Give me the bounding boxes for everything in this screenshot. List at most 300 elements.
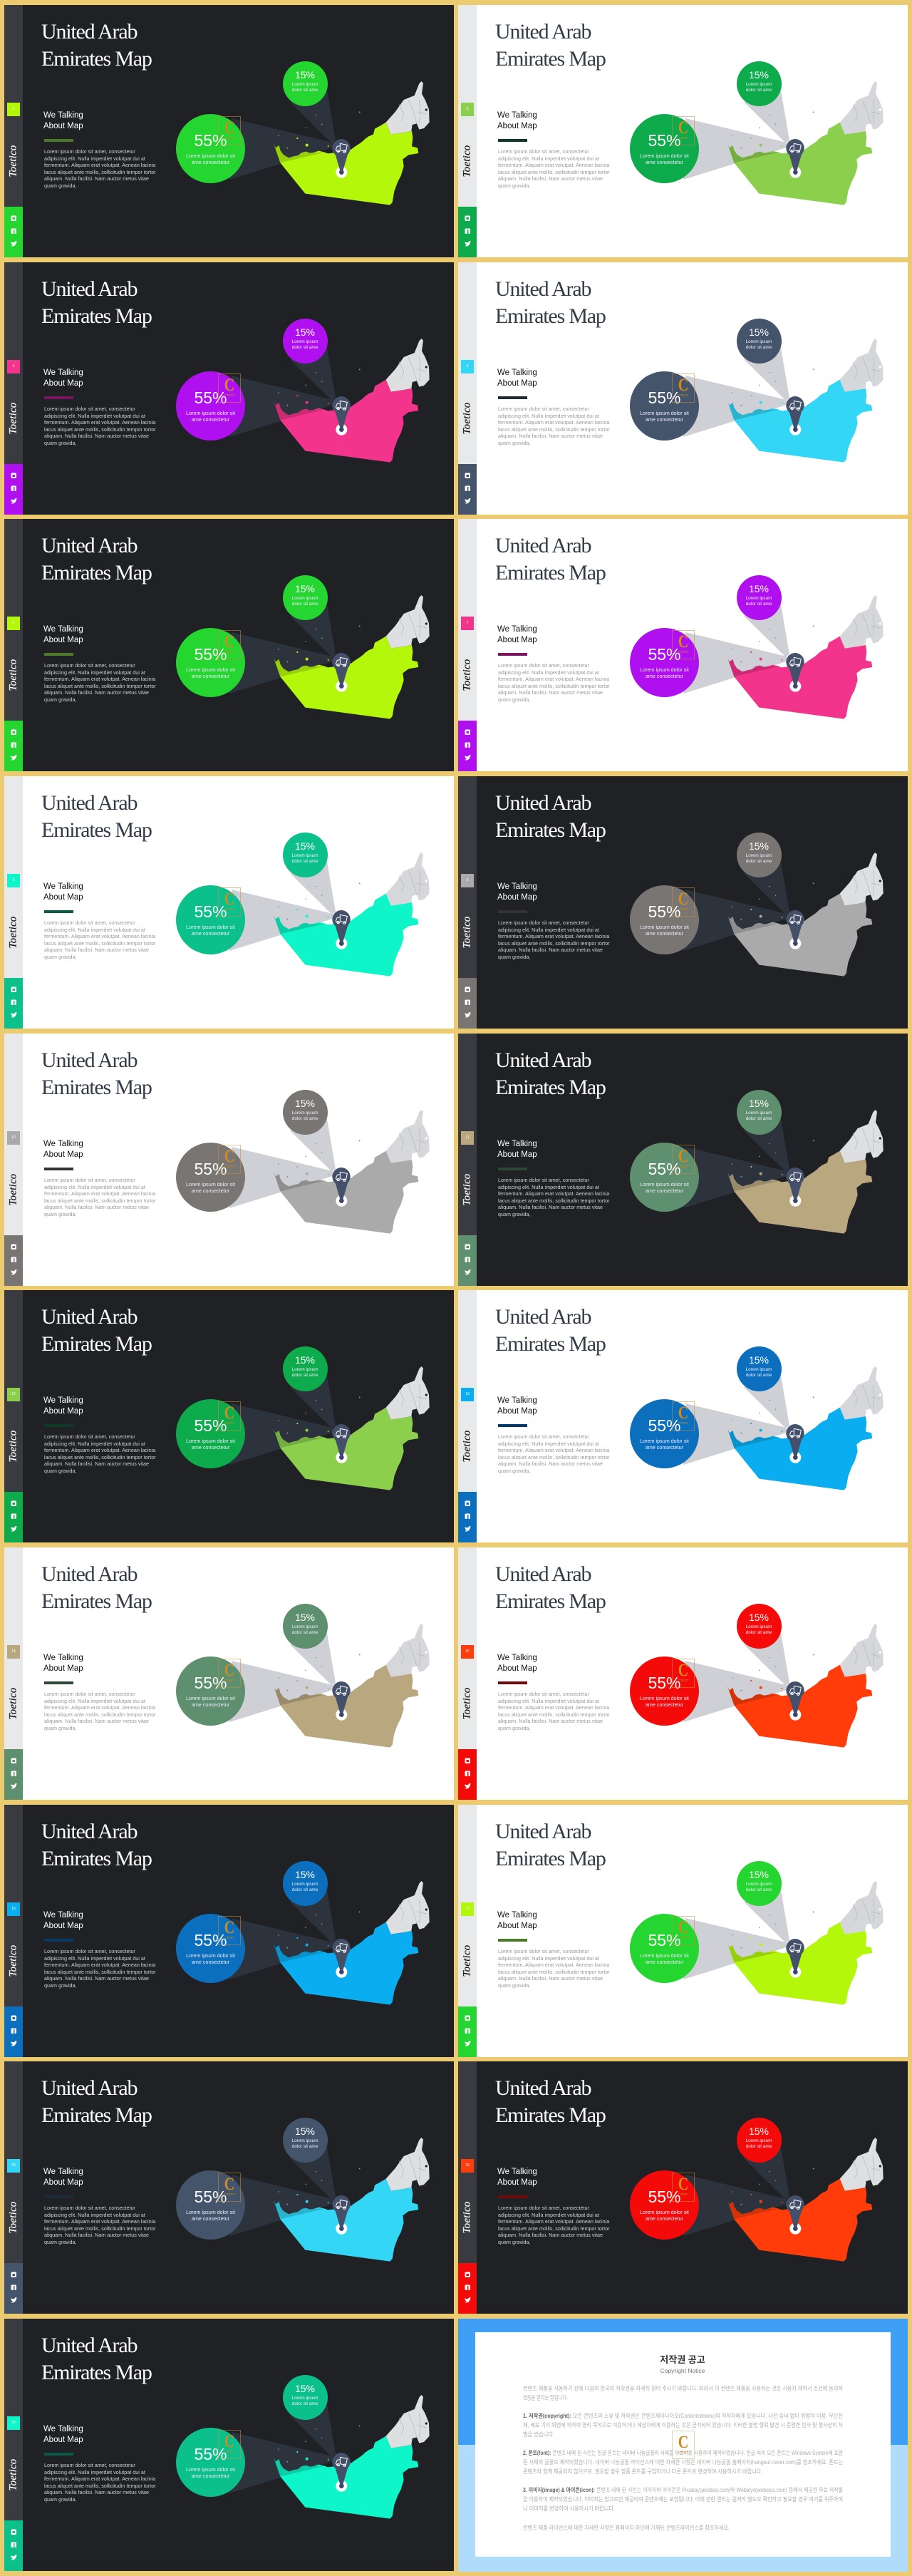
body text: adipiscing elit. Nulla imperdiet volutpat dui at <box>44 155 145 162</box>
panel: copyright notice <box>458 2319 908 2572</box>
social icons <box>4 207 23 257</box>
callout: 55%: ame consectetur <box>192 2473 229 2479</box>
watermark logo: C <box>224 1661 234 1680</box>
watermark logo: CTEST <box>224 1165 234 1168</box>
section 3: image and icon <box>523 2486 843 2512</box>
watermark logo: C <box>678 2175 688 2194</box>
subheading: About Map <box>497 893 537 902</box>
slide number badge <box>461 360 474 373</box>
callout: 55%: 55% <box>194 2445 227 2463</box>
map with pin <box>4 1290 454 1542</box>
slide number badge: 10 <box>11 1135 16 1140</box>
body text: Lorem ipsum dolor sit amet, consectetur <box>498 406 589 412</box>
body text: adipiscing elit. Nulla imperdiet volutpat dui at <box>44 1184 145 1190</box>
callout: 55% <box>630 114 699 182</box>
brand name: Toetico <box>7 659 19 691</box>
slide number badge: 14 <box>11 1649 16 1654</box>
title <box>41 791 152 842</box>
title: United Arab <box>41 20 137 43</box>
title: Emirates Map <box>495 1076 606 1099</box>
slide number badge <box>7 1902 20 1916</box>
brand name: Toetico <box>462 1173 473 1206</box>
body text: fermentum. Aliquam erat volutpat. Aenean lacinia <box>44 1447 155 1453</box>
intro paragraph: 셨음을 알리는 말입니다. <box>523 2394 568 2401</box>
callout: 55%: Lorem ipsum dolor sit <box>186 1180 235 1187</box>
subheading: About Map <box>497 1664 537 1673</box>
body text: aliquam. Nulla facilisi. Nam auctor metus vitae <box>44 689 149 696</box>
body text: fermentum. Aliquam erat volutpat. Aenean lacinia <box>44 2218 155 2225</box>
callout: 55%: 55% <box>194 1159 227 1178</box>
body text: lacus aliquet ante mollis, sollicitudin tempor tortor <box>498 1454 610 1460</box>
watermark logo <box>672 373 695 403</box>
body text <box>498 1177 610 1217</box>
social icons <box>458 1492 477 1542</box>
title: United Arab <box>495 277 591 301</box>
slide number badge <box>461 1902 474 1916</box>
brand name: Toetico <box>462 1944 473 1977</box>
body text <box>44 2205 156 2245</box>
sidebar <box>4 1034 23 1286</box>
subheading <box>43 369 83 388</box>
callout: 55%: Lorem ipsum dolor sit <box>186 2466 235 2472</box>
callout: 15% <box>282 1860 328 1906</box>
callout: 15%: Lorem ipsum <box>292 82 318 87</box>
body text: Lorem ipsum dolor sit amet, consectetur <box>44 1948 135 1954</box>
title: United Arab <box>41 534 137 557</box>
watermark logo <box>672 630 695 659</box>
body text: lacus aliquet ante mollis, sollicitudin tempor tortor <box>498 169 610 175</box>
sidebar <box>458 262 477 515</box>
title: United Arab <box>495 1049 591 1072</box>
subheading: We Talking <box>497 111 537 120</box>
subheading: About Map <box>43 1150 83 1159</box>
title: Emirates Map <box>495 818 606 842</box>
brand name: Toetico <box>7 2201 19 2234</box>
callout: 15%: 15% <box>295 1098 315 1109</box>
body text: lacus aliquet ante mollis, sollicitudin tempor tortor <box>44 683 156 689</box>
callout: 15%: dolor sit ame <box>292 88 318 93</box>
slide number badge <box>7 360 20 373</box>
subheading: We Talking <box>497 2168 537 2176</box>
subheading: About Map <box>497 122 537 130</box>
callout: 15%: 15% <box>749 1354 769 1366</box>
slide number badge <box>461 103 474 116</box>
brand name: Toetico <box>7 2458 19 2491</box>
title: Emirates Map <box>41 1847 152 1870</box>
body text: Lorem ipsum dolor sit amet, consectetur <box>44 1691 135 1697</box>
callout: 55%: ame consectetur <box>646 673 683 679</box>
sidebar <box>458 1034 477 1286</box>
title: United Arab <box>41 277 137 301</box>
subheading <box>497 1910 537 1931</box>
callout: 55%: Lorem ipsum dolor sit <box>186 153 235 158</box>
callout: 15%: dolor sit ame <box>746 602 772 607</box>
title: Emirates Map <box>41 47 152 71</box>
social icons <box>4 2520 23 2571</box>
body text <box>44 406 156 446</box>
watermark logo: CTEST <box>224 2450 234 2453</box>
body text: Lorem ipsum dolor sit amet, consectetur <box>44 662 135 669</box>
brand name: Toetico <box>462 916 473 949</box>
body text: aliquam. Nulla facilisi. Nam auctor metus vitae <box>498 1975 603 1982</box>
subheading: About Map <box>43 1922 83 1930</box>
watermark logo <box>218 2430 241 2459</box>
subheading: We Talking <box>43 369 83 377</box>
subheading <box>497 1653 537 1674</box>
callout: 55%: 55% <box>194 644 227 663</box>
body text: aliquam. Nulla facilisi. Nam auctor metus vitae <box>44 2489 149 2495</box>
callout: 15%: Lorem ipsum <box>292 1882 318 1887</box>
watermark logo: CTEST <box>224 1679 234 1682</box>
panel: slide 19 <box>4 2319 454 2570</box>
subheading: About Map <box>43 893 83 902</box>
title <box>495 1304 606 1357</box>
body text: fermentum. Aliquam erat volutpat. Aenean lacinia <box>498 419 609 426</box>
intro paragraph: 컨텐츠 제품을 사용하기 전에 다음의 한국의 저작권을 자세히 읽어 주시기 바랍니다. 따라서 이 컨텐츠 제품을 사용하는 것은 사용자 계약서 조건에 동의하 <box>523 2385 843 2392</box>
map with pin <box>4 1547 454 1799</box>
watermark logo <box>218 1916 241 1945</box>
callout: 15% <box>282 61 328 105</box>
title: Emirates Map <box>495 304 606 328</box>
title: Emirates Map <box>41 304 152 328</box>
callout: 15% <box>737 318 781 364</box>
body text: fermentum. Aliquam erat volutpat. Aenean lacinia <box>44 1704 155 1711</box>
title: United Arab <box>41 2334 137 2357</box>
callout: 15%: 15% <box>295 1869 315 1880</box>
body text: quam gravida, <box>498 2239 531 2245</box>
white notice card <box>475 2332 891 2557</box>
callout: 55%: Lorem ipsum dolor sit <box>186 1952 235 1959</box>
subheading: We Talking <box>497 1654 537 1662</box>
slide number badge <box>461 1388 474 1401</box>
panel: slide 16 <box>458 1805 908 2057</box>
callout: 15%: Lorem ipsum <box>746 1367 772 1372</box>
body text <box>498 2205 610 2245</box>
callout: 15%: 15% <box>749 1612 769 1623</box>
map with pin <box>458 1290 908 1542</box>
callout: 55% <box>630 1913 699 1983</box>
brand name: Toetico <box>7 1687 19 1720</box>
watermark logo <box>218 1401 241 1431</box>
callout: 15% <box>282 2117 328 2163</box>
body text: lacus aliquet ante mollis, sollicitudin tempor tortor <box>44 2225 156 2232</box>
callout: 55%: Lorem ipsum dolor sit <box>640 666 689 673</box>
watermark logo: C <box>224 632 234 651</box>
watermark logo: C <box>678 376 688 395</box>
social icons <box>4 1235 23 1286</box>
watermark logo: C <box>224 890 234 909</box>
body text: aliquam. Nulla facilisi. Nam auctor metus vitae <box>44 1204 149 1210</box>
callout: 55%: Lorem ipsum dolor sit <box>640 1695 689 1701</box>
title: United Arab <box>495 791 591 815</box>
callout: 55%: 55% <box>648 131 681 150</box>
callout: 55%: ame consectetur <box>646 1187 683 1194</box>
subheading: We Talking <box>43 2425 83 2433</box>
body text: Lorem ipsum dolor sit amet, consectetur <box>498 1433 589 1440</box>
subheading: We Talking <box>43 111 83 120</box>
social icons <box>458 721 477 771</box>
body text: fermentum. Aliquam erat volutpat. Aenean lacinia <box>44 933 155 939</box>
body text: adipiscing elit. Nulla imperdiet volutpat dui at <box>44 1698 145 1704</box>
body text: quam gravida, <box>44 954 77 960</box>
callout: 15%: 15% <box>749 2126 769 2137</box>
panel: slide 5 <box>4 519 454 771</box>
map with pin <box>4 2061 454 2313</box>
callout: 55% <box>176 1142 245 1212</box>
callout: 55%: Lorem ipsum dolor sit <box>640 409 689 416</box>
watermark logo: C <box>678 1147 688 1166</box>
social icons <box>4 2006 23 2057</box>
body text: fermentum. Aliquam erat volutpat. Aenean lacinia <box>498 1447 609 1453</box>
callout: 55%: 55% <box>648 2187 681 2205</box>
callout: 15%: 15% <box>749 840 769 852</box>
subheading: We Talking <box>497 1140 537 1148</box>
callout: 55%: Lorem ipsum dolor sit <box>640 1180 689 1187</box>
watermark logo <box>218 373 241 403</box>
slide number badge: 12 <box>11 1392 16 1396</box>
callout: 55%: Lorem ipsum dolor sit <box>640 153 689 158</box>
callout: 15%: Lorem ipsum <box>292 596 318 601</box>
callout: 15%: dolor sit ame <box>746 859 772 864</box>
section 3: image and icon: 나 이미지를 변경하여 사용하시기 바랍니다. <box>523 2505 615 2512</box>
sidebar <box>458 5 477 257</box>
subheading <box>497 882 537 902</box>
callout: 55%: 55% <box>194 902 227 921</box>
title: Emirates Map <box>41 561 152 584</box>
callout: 15% <box>737 575 781 620</box>
callout: 15%: Lorem ipsum <box>746 1111 772 1116</box>
slide number badge <box>7 1388 20 1401</box>
callout: 15% <box>737 61 781 105</box>
callout: 15%: Lorem ipsum <box>292 2396 318 2401</box>
callout: 15%: 15% <box>295 1612 315 1623</box>
social icons <box>4 2263 23 2314</box>
panel: slide 3 <box>4 262 454 515</box>
callout: 55% <box>630 627 699 697</box>
social icons <box>4 721 23 771</box>
slide number badge: 20 <box>11 2421 16 2425</box>
body text: quam gravida, <box>498 182 531 189</box>
subheading <box>497 111 537 130</box>
callout: 15%: dolor sit ame <box>746 1373 772 1378</box>
watermark logo: C <box>224 1918 234 1937</box>
title: Emirates Map <box>41 2103 152 2127</box>
body text: aliquam. Nulla facilisi. Nam auctor metus vitae <box>498 947 603 953</box>
watermark logo <box>672 1145 695 1174</box>
watermark logo: CTEST <box>678 1679 688 1682</box>
callout: 55%: Lorem ipsum dolor sit <box>186 666 235 673</box>
watermark logo <box>218 116 241 145</box>
body text: quam gravida, <box>498 954 531 960</box>
subheading: About Map <box>497 1150 537 1159</box>
title: Emirates Map <box>495 1847 606 1870</box>
title <box>41 20 152 71</box>
subheading: We Talking <box>43 1654 83 1662</box>
body text: aliquam. Nulla facilisi. Nam auctor metus vitae <box>44 1975 149 1982</box>
body text: quam gravida, <box>44 2239 77 2245</box>
callout: 15% <box>737 1089 781 1135</box>
slide number badge: 17 <box>465 1907 470 1911</box>
social icons <box>458 1235 477 1286</box>
body text: Lorem ipsum dolor sit amet, consectetur <box>498 919 589 926</box>
callout: 55%: Lorem ipsum dolor sit <box>640 1437 689 1444</box>
sidebar <box>4 2061 23 2314</box>
callout: 15%: dolor sit ame <box>292 1887 318 1892</box>
slide number badge: 4 <box>13 364 14 369</box>
section 1: copyright <box>523 2412 843 2438</box>
title <box>41 2075 152 2128</box>
subheading <box>43 2424 83 2445</box>
callout: 55%: ame consectetur <box>192 673 229 679</box>
slide number badge: 16 <box>11 1907 16 1911</box>
body text: quam gravida, <box>44 1725 77 1731</box>
title: Emirates Map <box>41 2361 152 2384</box>
subheading <box>497 2167 537 2188</box>
brand name: Toetico <box>462 1430 473 1463</box>
brand name: Toetico <box>7 402 19 435</box>
watermark logo: CTEST <box>678 650 688 654</box>
title: United Arab <box>41 1820 137 1843</box>
watermark logo: CTEST <box>678 907 688 911</box>
slide number badge: 9 <box>467 878 468 882</box>
section 1: copyright: 벌을 받습니다. <box>523 2431 554 2438</box>
subheading <box>497 625 537 644</box>
panel: slide 11 <box>4 1290 454 1542</box>
panel: slide 10 <box>458 1034 908 1286</box>
social icons <box>4 978 23 1029</box>
body text: aliquam. Nulla facilisi. Nam auctor metus vitae <box>44 175 149 182</box>
title <box>41 1304 152 1357</box>
panel: slide 18 <box>458 2061 908 2314</box>
body text: adipiscing elit. Nulla imperdiet volutpat dui at <box>44 1441 145 1447</box>
callout: 55%: 55% <box>648 1930 681 1949</box>
callout: 15%: Lorem ipsum <box>292 1367 318 1372</box>
panel: slide 7 <box>4 776 454 1028</box>
body text: fermentum. Aliquam erat volutpat. Aenean lacinia <box>498 2218 609 2225</box>
title: United Arab <box>41 1049 137 1072</box>
callout: 15%: 15% <box>295 326 315 338</box>
map with pin <box>683 339 884 463</box>
body text: aliquam. Nulla facilisi. Nam auctor metus vitae <box>44 947 149 953</box>
sidebar <box>458 776 477 1028</box>
callout: 55%: ame consectetur <box>192 416 229 423</box>
title: United Arab <box>495 1562 591 1586</box>
callout: 55%: Lorem ipsum dolor sit <box>640 1952 689 1959</box>
body text: fermentum. Aliquam erat volutpat. Aenean lacinia <box>44 2475 155 2482</box>
watermark logo <box>672 2431 695 2459</box>
callout: 15%: Lorem ipsum <box>292 1111 318 1116</box>
slide number badge: 15 <box>465 1649 470 1654</box>
title <box>41 277 152 328</box>
callout: 55%: ame consectetur <box>646 1701 683 1708</box>
title <box>41 1561 152 1614</box>
callout: 15% <box>282 2375 328 2419</box>
section 3: image and icon: 을 이용하여 제작되었습니다. 이미지는 참고로만 제공되며 콘텐츠에는 포함됩니다. 이에 관한 권리는 원저작 별도로 확인하고 필요할 경우 여기를 위주하여 <box>523 2495 843 2503</box>
callout: 15%: Lorem ipsum <box>292 2138 318 2143</box>
subheading: About Map <box>43 1664 83 1673</box>
subheading: We Talking <box>497 1396 537 1405</box>
body text: aliquam. Nulla facilisi. Nam auctor metus vitae <box>498 1460 603 1467</box>
subheading: About Map <box>497 379 537 388</box>
subheading <box>497 369 537 388</box>
body text <box>498 662 610 703</box>
callout: 15%: Lorem ipsum <box>746 2138 772 2143</box>
callout: 15%: Lorem ipsum <box>292 339 318 344</box>
map with pin <box>458 1805 908 2056</box>
body text: fermentum. Aliquam erat volutpat. Aenean lacinia <box>498 162 609 168</box>
watermark logo <box>218 2173 241 2202</box>
sidebar <box>4 519 23 771</box>
callout: 55%: ame consectetur <box>646 1444 683 1451</box>
watermark logo: C <box>224 376 234 395</box>
callout: 55%: 55% <box>194 1930 227 1949</box>
slide number badge <box>7 1645 20 1659</box>
callout: 15%: 15% <box>295 840 315 852</box>
sidebar <box>4 1290 23 1542</box>
body text: Lorem ipsum dolor sit amet, consectetur <box>44 2462 135 2468</box>
body text: lacus aliquet ante mollis, sollicitudin tempor tortor <box>498 1969 610 1975</box>
callout: 55%: ame consectetur <box>192 1444 229 1451</box>
slide number badge: 5 <box>467 364 468 369</box>
body text: aliquam. Nulla facilisi. Nam auctor metus vitae <box>44 433 149 439</box>
callout: 15%: 15% <box>295 2126 315 2137</box>
callout: 15% <box>282 1089 328 1135</box>
callout: 55% <box>176 1657 245 1725</box>
subheading: We Talking <box>43 1140 83 1148</box>
slide number badge: 2 <box>13 107 14 111</box>
title <box>495 791 606 842</box>
subheading: About Map <box>43 636 83 644</box>
callout: 55%: ame consectetur <box>646 416 683 423</box>
brand name: Toetico <box>7 916 19 949</box>
panel: slide 2 <box>458 5 908 257</box>
body text <box>44 1948 156 1989</box>
sidebar <box>458 1290 477 1542</box>
body text: quam gravida, <box>498 1211 531 1217</box>
slide number badge <box>461 1645 474 1659</box>
callout: 15%: dolor sit ame <box>746 1116 772 1121</box>
body text: Lorem ipsum dolor sit amet, consectetur <box>498 1177 589 1183</box>
panel: slide 1 <box>4 5 454 257</box>
body text: lacus aliquet ante mollis, sollicitudin tempor tortor <box>44 1969 156 1975</box>
body text: quam gravida, <box>44 1982 77 1989</box>
body text <box>44 1177 156 1217</box>
callout: 55%: 55% <box>194 1416 227 1434</box>
watermark logo: CTEST <box>224 136 234 140</box>
slide number badge <box>461 617 474 630</box>
title <box>495 2075 606 2128</box>
callout: 15%: Lorem ipsum <box>746 339 772 344</box>
watermark logo: CTEST <box>678 2451 688 2454</box>
callout: 55% <box>630 885 699 954</box>
callout: 55%: 55% <box>194 388 227 406</box>
panel: slide 15 <box>4 1805 454 2057</box>
watermark logo: CTEST <box>678 136 688 140</box>
body text <box>498 1948 610 1989</box>
callout: 15%: dolor sit ame <box>746 88 772 93</box>
callout: 55%: Lorem ipsum dolor sit <box>186 1437 235 1444</box>
body text: fermentum. Aliquam erat volutpat. Aenean lacinia <box>498 1704 609 1711</box>
callout: 15%: 15% <box>295 1354 315 1366</box>
callout: 15%: Lorem ipsum <box>746 1624 772 1629</box>
body text: aliquam. Nulla facilisi. Nam auctor metus vitae <box>44 1718 149 1724</box>
slide number badge <box>461 874 474 887</box>
brand name: Toetico <box>7 1173 19 1206</box>
body text: fermentum. Aliquam erat volutpat. Aenean lacinia <box>498 1962 609 1968</box>
body text: Lorem ipsum dolor sit amet, consectetur <box>44 919 135 926</box>
watermark logo: CTEST <box>224 907 234 911</box>
section 1: copyright: 재, 배포 기기 위법에 의하여 영리 목적으로 이용하거나 제삼자에게 이용하는 것은 금지되어 있습니다. 이러한 불법 행위 발견 시 준엄한 민사 및 형사상의 처 <box>523 2421 843 2428</box>
